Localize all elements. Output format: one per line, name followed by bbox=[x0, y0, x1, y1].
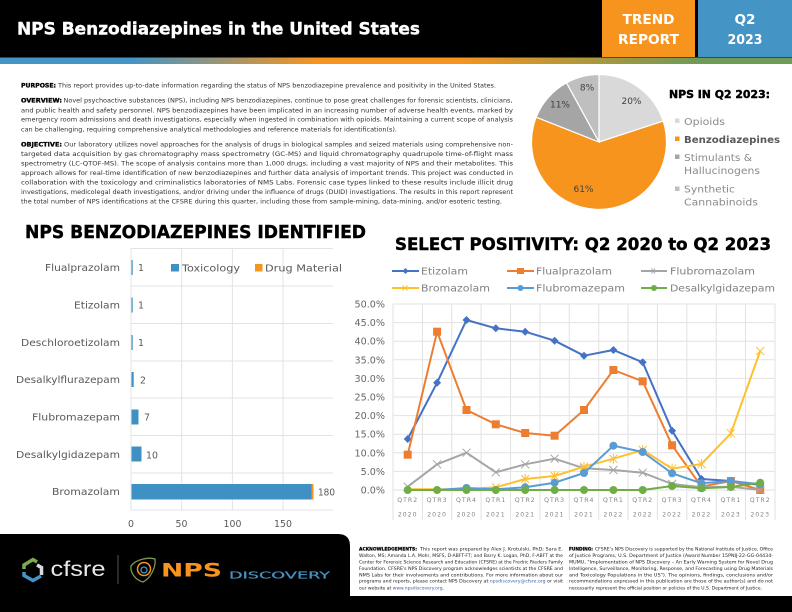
text block: funding: necessarily represent the official position or policies of the U.S. Department of Justice. bbox=[569, 585, 762, 591]
x axis labels: 2023 bbox=[721, 512, 741, 518]
x axis labels: 2021 bbox=[515, 512, 535, 518]
text block: objective: the total number of NPS identifications at the CFSRE during this quarter, including those from sample-mining, data-mining, and/or esoteric testing. bbox=[21, 199, 502, 205]
y axis labels: 35.0% bbox=[355, 355, 385, 366]
bars bbox=[132, 260, 314, 500]
x axis labels: QTR2 bbox=[515, 497, 536, 504]
text block: objective: Our laboratory utilizes novel approaches for the analysis of drugs in biological samples and seized materials using comprehensive non- bbox=[64, 143, 513, 149]
bar category labels: Deschloroetizolam bbox=[21, 338, 120, 349]
text block: objective bbox=[21, 143, 514, 205]
text block: acknowledgements: Foundation. CFSRE's NPS Discovery program acknowledges scientists at the CFSRE and bbox=[359, 566, 563, 572]
x axis labels: 2022 bbox=[633, 512, 653, 518]
bar axis labels: 150 bbox=[274, 519, 292, 530]
x axis labels: 2021 bbox=[545, 512, 564, 518]
heading: select positivity: SELECT POSITIVITY: Q2 2020 to Q2 2023 bbox=[395, 235, 771, 255]
pie chart: NPS in Q2 2023: 20% bbox=[621, 97, 642, 107]
y axis labels: 50.0% bbox=[355, 300, 385, 310]
x axis labels: QTR2 bbox=[397, 497, 418, 504]
badge: trend report: REPORT bbox=[618, 33, 679, 48]
text block: funding: FUNDING: bbox=[569, 547, 593, 553]
text block: funding: of Justice Programs, U.S. Department of Justice (Award Number 15PNIJ-22-GG-04434- bbox=[569, 553, 773, 559]
bar axis labels: 0 bbox=[128, 519, 134, 530]
bar category labels: Desalkylflurazepam bbox=[16, 375, 120, 386]
series: Flualprazolam bbox=[404, 328, 764, 494]
badge: quarter bbox=[698, 0, 792, 57]
text block: objective: approach allows for real-time identification of new benzodiazepines and further data analysis of important trends. This project was conducted in bbox=[21, 171, 513, 177]
x axis labels: QTR1 bbox=[720, 497, 741, 504]
text block: overview bbox=[21, 99, 514, 133]
bar value labels: 180 bbox=[318, 488, 335, 498]
x axis labels: 2020 bbox=[427, 512, 447, 518]
pie legend: Stimulants & bbox=[684, 153, 752, 164]
logo: NPS Discovery: NPS bbox=[161, 560, 222, 582]
text block: funding: and Toxicology Populations in the US"). The opinions, findings, conclusions and/or bbox=[569, 572, 773, 578]
text block: acknowledgements: our website at www.npsdiscovery.org. bbox=[359, 585, 444, 591]
pie chart: NPS in Q2 2023: 8% bbox=[580, 84, 595, 94]
pie chart: NPS in Q2 2023: 11% bbox=[550, 100, 570, 110]
x axis labels: QTR4 bbox=[691, 497, 712, 504]
text block: overview: emergency room admissions and death investigations, especially when ingested in combination with opioids. Maintaining a current scope of analysis bbox=[21, 118, 513, 124]
logo divider bbox=[118, 555, 119, 584]
x axis labels: 2020 bbox=[398, 512, 418, 518]
bar value labels: 7 bbox=[144, 412, 150, 424]
badge: trend report bbox=[602, 0, 695, 57]
x axis labels: QTR3 bbox=[662, 497, 683, 504]
text block: acknowledgements: programs and reports, please contact NPS Discovery at npsdiscovery@cfsre.org or visit bbox=[359, 579, 563, 585]
bar category labels: Flualprazolam bbox=[45, 263, 120, 274]
y axis labels bbox=[355, 300, 385, 496]
text block: funding bbox=[569, 547, 774, 591]
y axis labels: 40.0% bbox=[355, 337, 385, 348]
x axis labels: QTR3 bbox=[544, 497, 565, 504]
bar value labels: 1 bbox=[138, 338, 144, 349]
series: Desalkylgidazepam bbox=[404, 479, 764, 494]
x axis labels: QTR3 bbox=[427, 497, 448, 504]
pie legend: Cannabinoids bbox=[684, 198, 758, 208]
bar category labels: Etizolam bbox=[74, 300, 120, 312]
line chart: select positivity bbox=[355, 300, 775, 520]
text block: objective: targeted data acquisition by gas chromatography mass spectrometry (GC-MS) and liquid chromatography quadrupole time-of-flight mass bbox=[21, 152, 513, 158]
bar value labels: 2 bbox=[140, 376, 146, 386]
bar value labels bbox=[138, 263, 335, 498]
x axis labels bbox=[397, 497, 771, 518]
badge: quarter: Q2 bbox=[734, 13, 756, 28]
x axis labels: QTR4 bbox=[574, 497, 594, 504]
series: Flubromazepam bbox=[408, 442, 764, 492]
y axis labels: 0.0% bbox=[361, 486, 385, 496]
line chart legend: Desalkylgidazepam bbox=[670, 284, 775, 294]
x axis labels: 2021 bbox=[486, 512, 506, 518]
y axis labels: 20.0% bbox=[355, 411, 385, 422]
x axis labels: 2022 bbox=[662, 512, 682, 518]
text block: overview: and public health and safety personnel. NPS benzodiazepines have been implicated in an increasing number of adverse health events, marked by bbox=[21, 108, 514, 114]
text block: acknowledgements: This report was prepared by Alex J. Krotulski, PhD; Sara E. bbox=[419, 547, 563, 553]
x axis labels: 2023 bbox=[750, 512, 770, 518]
y axis labels: 25.0% bbox=[355, 392, 385, 404]
title: NPS Benzodiazepines in the United States bbox=[17, 20, 420, 40]
x axis labels: 2021 bbox=[574, 512, 594, 518]
logo: cfsre bbox=[24, 558, 106, 581]
heading: NPS benzodiazepines identified: NPS BENZODIAZEPINES IDENTIFIED bbox=[25, 222, 366, 243]
text block: purpose: This report provides up-to-date information regarding the status of NPS benzodiazepine prevalence and positivity in the United States. bbox=[57, 83, 496, 89]
badge: quarter: 2023 bbox=[728, 33, 762, 48]
pie chart: NPS in Q2 2023: 61% bbox=[573, 185, 594, 195]
line chart legend: Flubromazolam bbox=[670, 266, 755, 278]
text block: funding: MUMU, "Implementation of NPS Discovery – An Early Warning System for Novel Drug bbox=[569, 559, 773, 565]
text block: objective: investigations, medicolegal death investigations, and/or driving under the influence of drugs (DUID) investigations. The results in this report represent bbox=[21, 190, 514, 196]
bar category labels bbox=[16, 263, 120, 498]
line chart legend: Bromazolam bbox=[421, 284, 490, 294]
x axis labels: 2022 bbox=[604, 512, 623, 518]
text block: acknowledgements bbox=[359, 547, 563, 591]
y axis labels: 5.0% bbox=[361, 467, 385, 478]
bar legend: Toxicology bbox=[181, 264, 241, 274]
pie legend: Opioids bbox=[684, 117, 725, 128]
text block: acknowledgements: Walton, MS; Amanda L.A. Mohr, MSFS, D-ABFT-FT; and Barry K. Logan, PhD, F-ABFT at the bbox=[359, 553, 563, 559]
footer band bbox=[0, 534, 792, 612]
bar legend: Drug Material bbox=[265, 264, 342, 274]
bar category labels: Flubromazepam bbox=[32, 412, 120, 424]
bar chart: benzodiazepines identified bbox=[16, 248, 342, 530]
text block: overview: Novel psychoactive substances (NPS), including NPS benzodiazepines, continue to pose great challenges for forensic scientists, clinicians, bbox=[64, 99, 513, 105]
x axis labels: QTR2 bbox=[750, 497, 771, 504]
pie legend: Hallucinogens bbox=[684, 166, 760, 177]
line chart legend bbox=[392, 266, 775, 294]
series: Bromazolam bbox=[408, 347, 764, 491]
pie legend heading: NPS IN Q2 2023: bbox=[669, 88, 770, 101]
bar legend bbox=[171, 264, 342, 274]
text block: acknowledgements: ACKNOWLEDGEMENTS: bbox=[359, 547, 417, 553]
text block: acknowledgements: Center for Forensic Science Research and Education (CFSRE) at the Fredric Rieders Family bbox=[359, 559, 563, 565]
bar axis labels bbox=[128, 519, 292, 530]
pie chart: NPS in Q2 2023 bbox=[531, 74, 666, 209]
text block: funding: recommendations expressed in this publication are those of the author(s) and do not bbox=[569, 579, 773, 585]
series: Etizolam bbox=[404, 316, 764, 489]
text block: objective: spectrometry (LC-QTOF-MS). The scope of analysis contains more than 1,000 drugs, including a vast majority of NPS and their metabolites. This bbox=[21, 162, 513, 168]
text block: overview: OVERVIEW: bbox=[21, 99, 62, 105]
text block: funding: Intelligence, Surveillance, Monitoring, Response, and Forecasting using Drug Materials bbox=[569, 566, 774, 572]
bar value labels: 1 bbox=[138, 300, 144, 312]
text block: purpose: PURPOSE: bbox=[21, 83, 56, 89]
pie legend bbox=[669, 88, 780, 208]
y axis labels: 15.0% bbox=[355, 430, 385, 441]
text block: objective: collaboration with the toxicology and criminalistics laboratories of NMS Labs. Forensic case types linked to these results include illicit drug bbox=[21, 180, 513, 186]
logo: cfsre: cfsre bbox=[50, 558, 106, 581]
bar category labels: Bromazolam bbox=[52, 487, 120, 498]
text block: overview: can be challenging, requiring comprehensive analytical methodologies and reference materials for identification(s). bbox=[21, 127, 397, 133]
bar category labels: Desalkylgidazepam bbox=[16, 450, 120, 461]
y axis labels: 10.0% bbox=[355, 448, 385, 459]
x axis labels: QTR1 bbox=[485, 497, 506, 504]
x axis labels: QTR4 bbox=[456, 497, 477, 504]
pie legend: Synthetic bbox=[684, 184, 735, 196]
x axis labels: QTR2 bbox=[632, 497, 653, 504]
line chart legend: Flubromazepam bbox=[536, 284, 625, 294]
text block: acknowledgements: NMS Labs for their involvements and contributions. For more information about our bbox=[359, 572, 563, 578]
line chart legend: Flualprazolam bbox=[536, 266, 612, 278]
x axis labels: 2022 bbox=[692, 512, 711, 518]
y axis labels: 30.0% bbox=[355, 374, 385, 385]
bar value labels: 10 bbox=[146, 450, 158, 462]
text block: objective: OBJECTIVE: bbox=[21, 143, 62, 149]
logo: NPS Discovery bbox=[131, 558, 330, 582]
header banner bbox=[0, 0, 792, 64]
pie legend: Benzodiazepines bbox=[684, 135, 780, 146]
x axis labels: QTR1 bbox=[603, 497, 624, 504]
bar axis labels: 100 bbox=[224, 519, 241, 530]
line chart legend: Etizolam bbox=[421, 266, 468, 278]
series: Flubromazolam bbox=[404, 449, 764, 494]
bar value labels: 1 bbox=[138, 263, 144, 274]
bar axis labels: 50 bbox=[176, 519, 187, 530]
logo: NPS Discovery: DISCOVERY bbox=[229, 570, 330, 582]
badge: trend report: TREND bbox=[622, 13, 675, 28]
y axis labels: 45.0% bbox=[355, 318, 385, 329]
x axis labels: 2020 bbox=[457, 512, 476, 518]
text block: funding: CFSRE's NPS Discovery is supported by the National Institute of Justice, Office bbox=[595, 547, 773, 553]
